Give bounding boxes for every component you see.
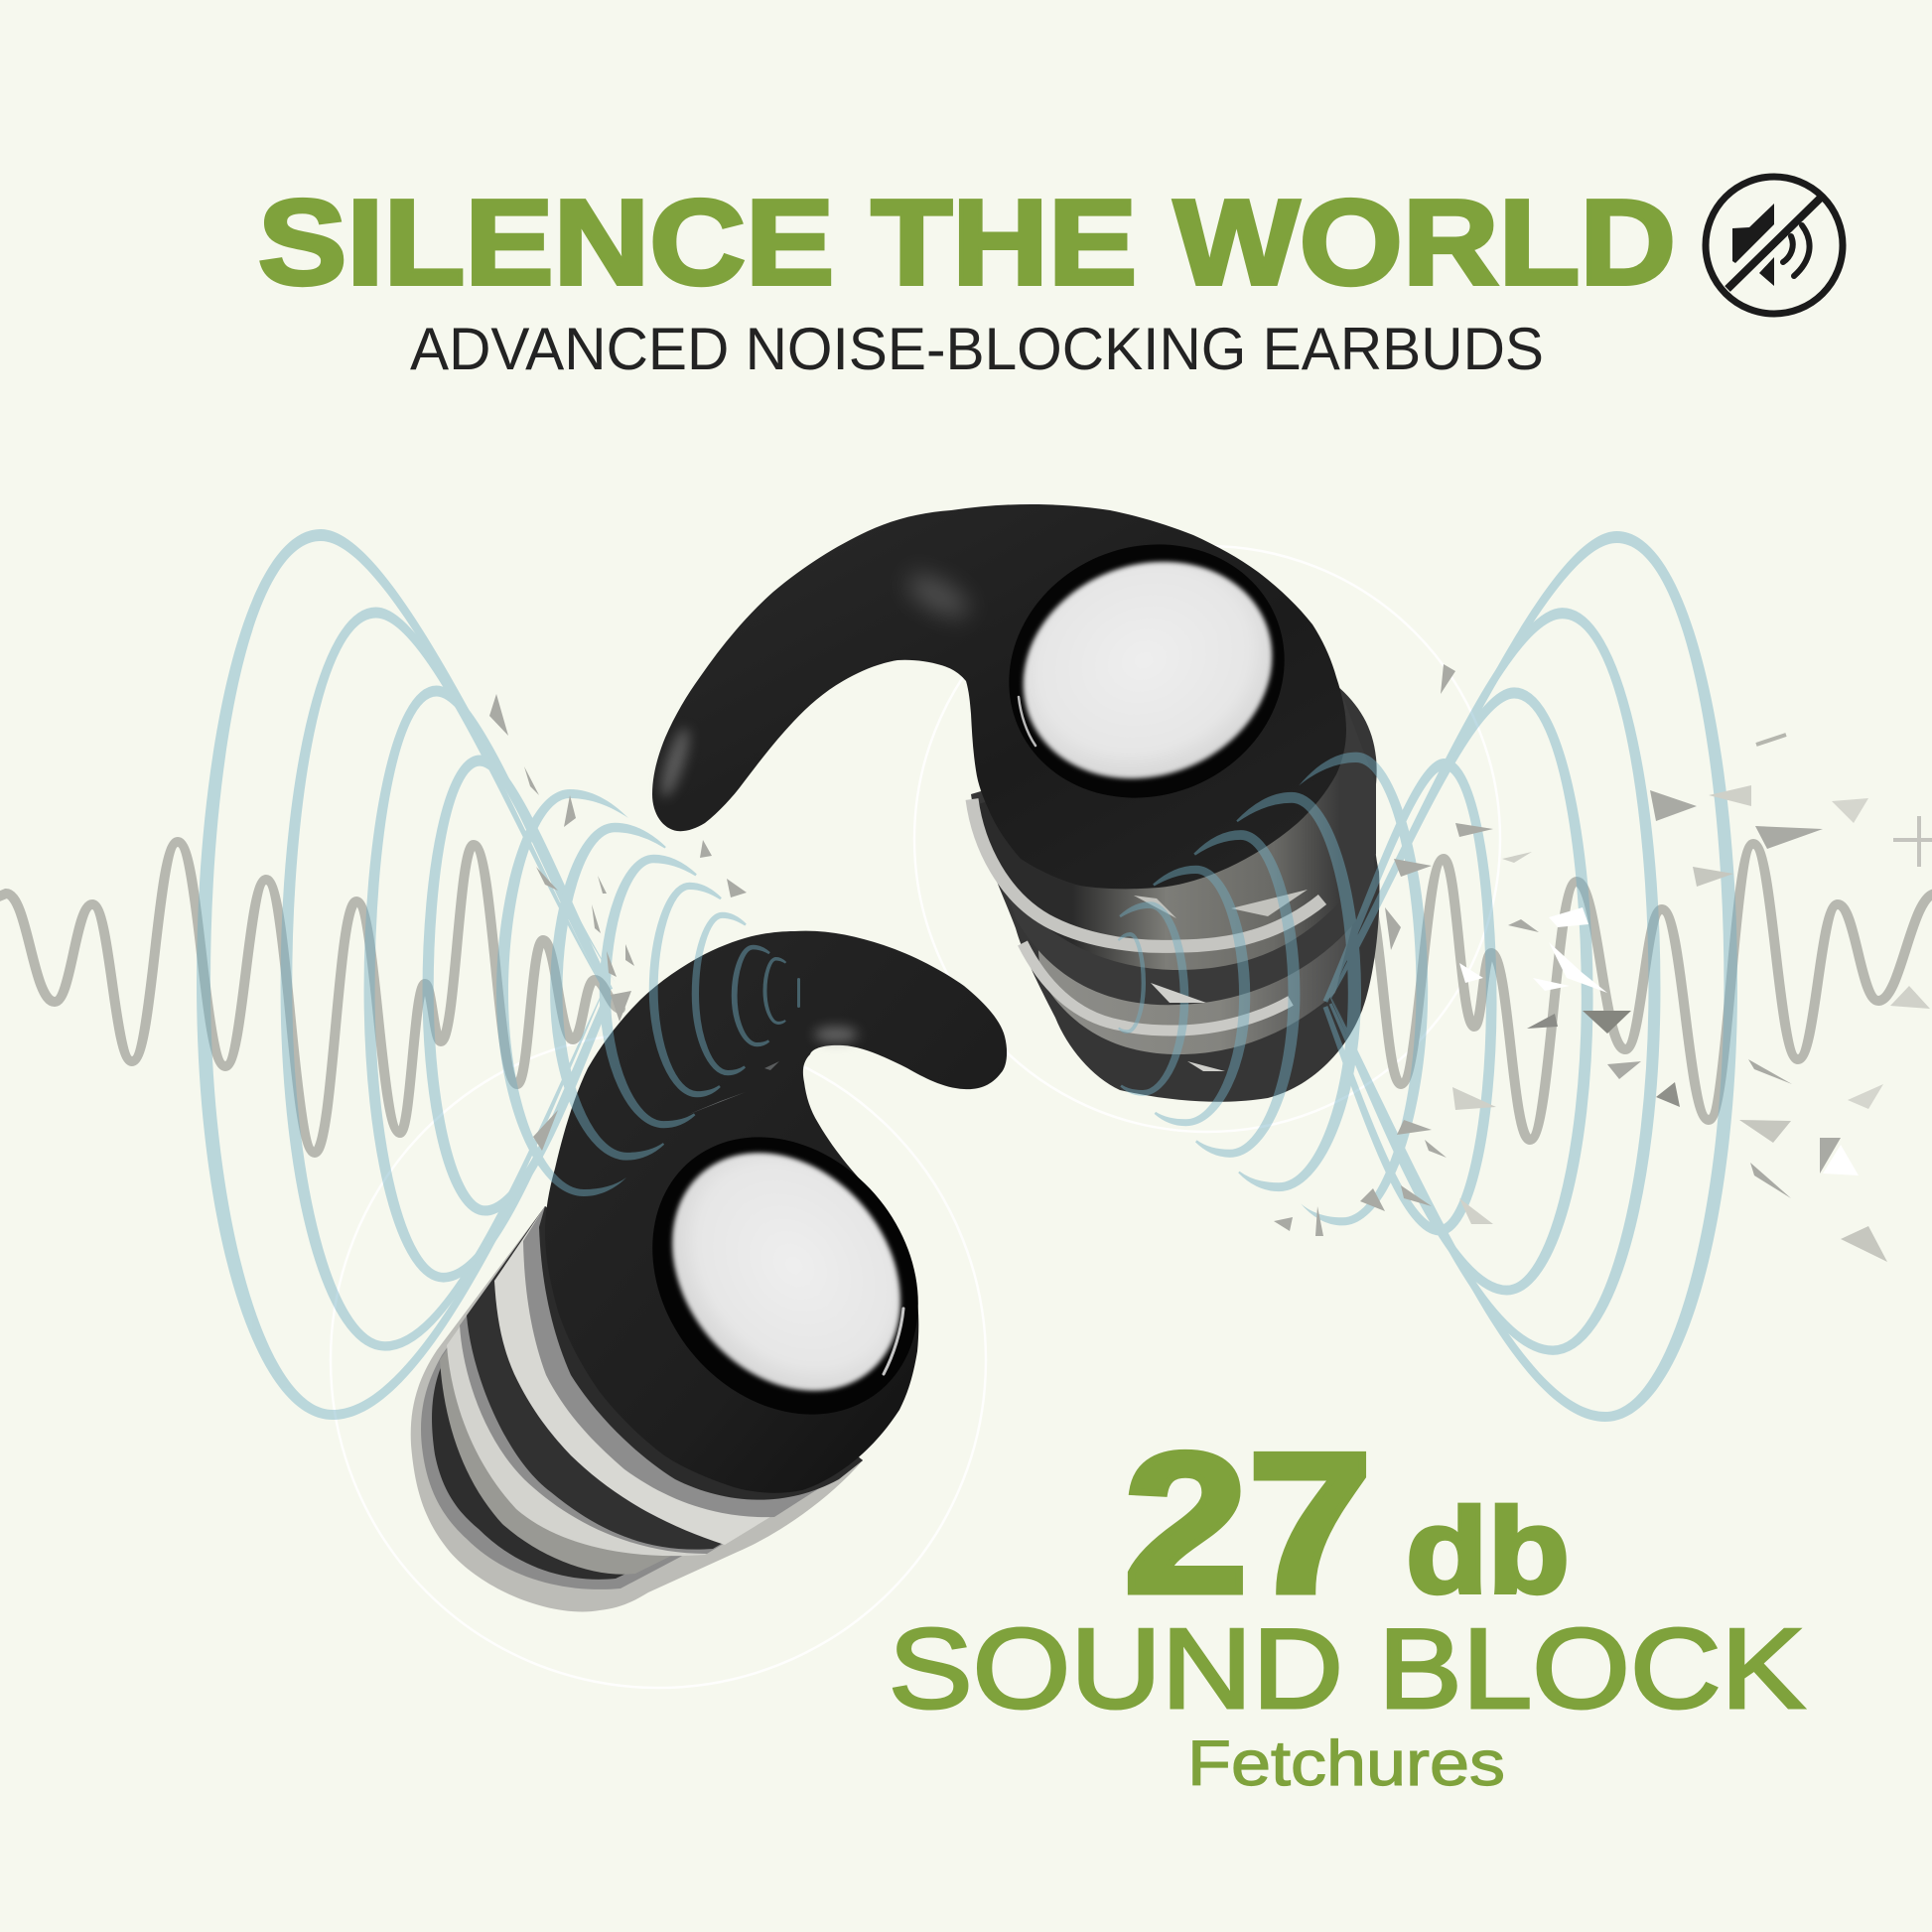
bottom earbud ear tips [411,1206,863,1611]
right sound wave [1365,844,1932,1140]
stat: 27 db: 27 [1124,1413,1372,1634]
earbud: bottom left [411,931,1007,1611]
top earbud gloss ring [969,502,1324,840]
bottom earbud cap and hook [545,931,1007,1493]
left noise debris [489,694,779,1151]
label: sound block: SOUND BLOCK [889,1606,1805,1732]
label: fetchures: Fetchures [1187,1727,1505,1799]
stat: 27 db: db [1406,1483,1570,1618]
stat: 27 db [1124,1413,1570,1634]
earbud: top right [652,502,1379,1102]
subtitle: ADVANCED NOISE-BLOCKING EARBUDS [410,316,1544,382]
bottom earbud foam [625,1107,947,1437]
faint halo rings [331,546,1500,1688]
left sound wave [0,842,621,1153]
bottom earbud gloss ring [598,1084,973,1467]
top earbud foam [991,525,1305,815]
left sound ripples [197,529,800,1420]
right noise debris [1151,664,1932,1262]
top earbud ear tips [971,685,1379,1102]
title: SILENCE THE WORLD [258,175,1676,310]
top earbud cap and hook [652,504,1346,889]
icon: muted speaker [1706,177,1843,314]
right sound ripples [1118,531,1737,1422]
